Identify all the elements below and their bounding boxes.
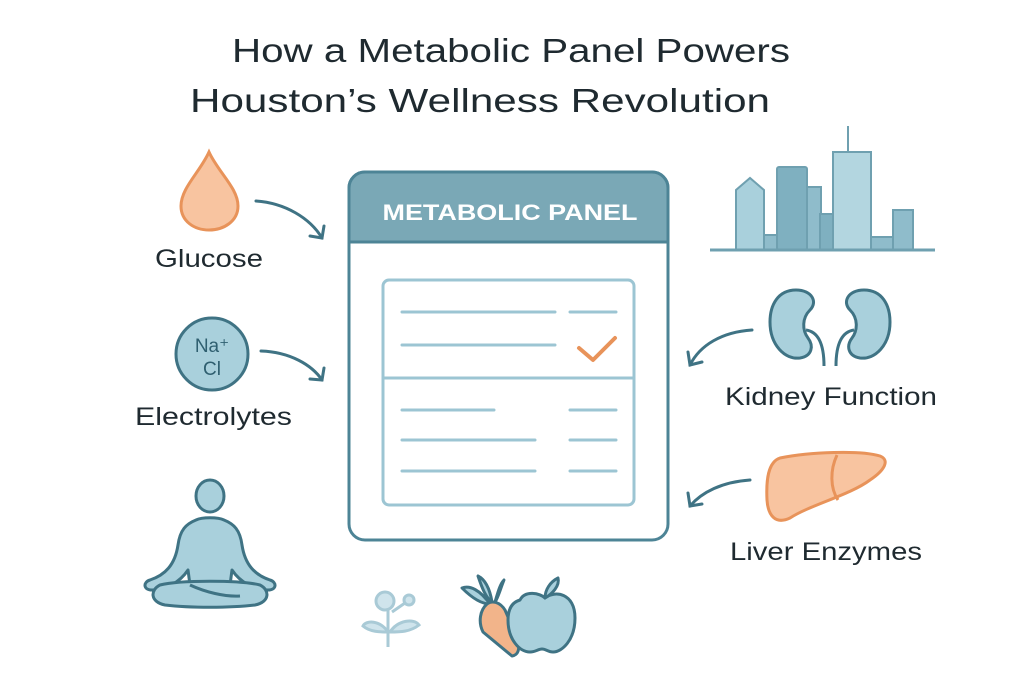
icon: carrot and apple [462, 576, 575, 656]
title: How a Metabolic Panel Powers [232, 32, 790, 69]
title: Houston’s Wellness Revolution [190, 82, 770, 119]
arrow: glucose to panel [256, 201, 324, 238]
panel: metabolic panel card [349, 172, 668, 540]
label: kidney function: Kidney Function [725, 383, 937, 411]
icon: kidneys [770, 290, 890, 366]
arrow: liver to panel [688, 480, 750, 506]
icon: meditation figure [145, 480, 275, 607]
icon: electrolytes: Na⁺ [195, 336, 229, 357]
icon: liver [767, 452, 885, 520]
title [190, 32, 790, 119]
card header [349, 172, 668, 242]
label: glucose: Glucose [155, 245, 263, 273]
icon: glucose drop [181, 152, 238, 230]
results table [383, 280, 634, 505]
icon: check mark [579, 338, 615, 360]
label: liver enzymes: Liver Enzymes [730, 538, 922, 566]
label: electrolytes: Electrolytes [135, 403, 292, 431]
icon: electrolytes: Cl [203, 359, 221, 380]
arrow: kidney to panel [688, 330, 752, 365]
icon: electrolytes [176, 318, 248, 390]
icon: city skyline [710, 126, 935, 250]
icon: plant sprout [363, 592, 419, 647]
card header: METABOLIC PANEL [382, 200, 638, 225]
arrow: electrolytes to panel [261, 351, 324, 380]
